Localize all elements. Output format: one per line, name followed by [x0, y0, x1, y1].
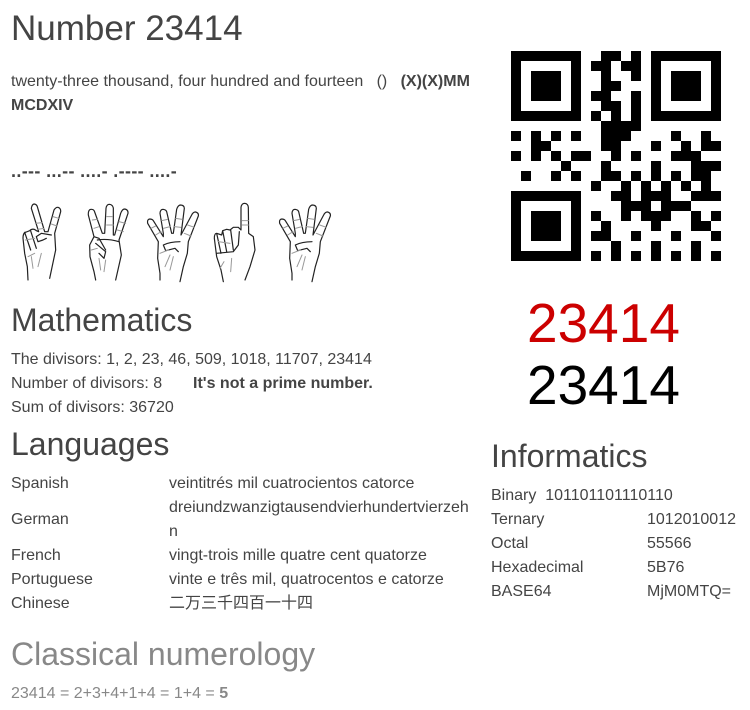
numerology calculation: 23414 = 2+3+4+1+4 = 1+4 = 5: [11, 685, 228, 702]
row: German: dreiundzwanzigtausendvierhundertvierzeh: [169, 499, 469, 516]
panel: mathematics facts: Sum of divisors: 36720: [11, 399, 174, 416]
morse code: ..--- ...-- ....- .---- ....-: [11, 161, 177, 181]
title: Number 23414: [11, 9, 243, 48]
row: Spanish: Spanish: [11, 475, 69, 492]
row: Portuguese: vinte e três mil, quatrocentos e catorze: [169, 571, 444, 588]
row: French: vingt-trois mille quatre cent quatorze: [169, 547, 427, 564]
row: Hexadecimal: [491, 559, 684, 576]
row: Chinese: [11, 594, 313, 612]
row: Ternary: Ternary: [491, 511, 544, 528]
QR code: [511, 51, 721, 261]
number name and roman numeral: twenty-three thousand, four hundred and fourteen () (X)(X)MM: [11, 73, 470, 90]
panel: mathematics facts: It's not a prime number.: [193, 375, 373, 392]
row: Octal: 55566: [647, 535, 692, 552]
large red number: 23414: [527, 292, 680, 354]
row: BASE64: MjM0MTQ=: [647, 583, 731, 600]
panel: mathematics facts: [11, 351, 373, 416]
heading: Mathematics: Mathematics: [11, 302, 192, 338]
panel: mathematics facts: The divisors: 1, 2, 23, 46, 509, 1018, 11707, 23414: [11, 351, 372, 368]
number name and roman numeral: MCDXIV: [11, 97, 73, 114]
icon: hand digit 2: [23, 204, 61, 280]
icon: hands showing digits 2 3 4 1 4: [22, 202, 332, 282]
row: Portuguese: [11, 571, 444, 588]
row: Ternary: [491, 511, 736, 528]
row: Binary: Binary 101101101110110: [491, 487, 673, 504]
row: Portuguese: Portuguese: [11, 571, 93, 588]
row: Chinese: Chinese: [11, 595, 70, 612]
row: BASE64: BASE64: [491, 583, 551, 600]
icon: hand digit 3: [88, 204, 128, 280]
row: Octal: Octal: [491, 535, 528, 552]
row: Spanish: [11, 475, 414, 492]
heading: Informatics: Informatics: [491, 438, 647, 474]
panel: mathematics facts: Number of divisors: 8: [11, 375, 162, 392]
row: German: n: [169, 523, 178, 540]
panel: languages table: [11, 475, 469, 612]
heading: Languages: Languages: [11, 426, 169, 462]
row: German: German: [11, 511, 69, 528]
panel: informatics table: [491, 487, 736, 600]
row: Spanish: veintitrés mil cuatrocientos catorce: [169, 475, 414, 492]
large black number: 23414: [527, 354, 680, 416]
icon: hand digit 4 first: [148, 205, 198, 282]
row: Ternary: 1012010012: [647, 511, 736, 528]
row: French: French: [11, 547, 61, 564]
row: Hexadecimal: Hexadecimal: [491, 559, 583, 576]
number name and roman numeral: [11, 73, 470, 114]
row: Chinese: 二万三千四百一十四: [169, 595, 313, 612]
row: Hexadecimal: 5B76: [647, 559, 684, 576]
row: Octal: [491, 535, 692, 552]
row: German: [11, 499, 469, 540]
icon: hand digit 1: [214, 203, 255, 282]
icon: hand digit 4 second: [280, 205, 330, 282]
row: French: [11, 547, 427, 564]
row: BASE64: [491, 583, 731, 600]
heading: Classical numerology: Classical numerology: [11, 636, 315, 672]
